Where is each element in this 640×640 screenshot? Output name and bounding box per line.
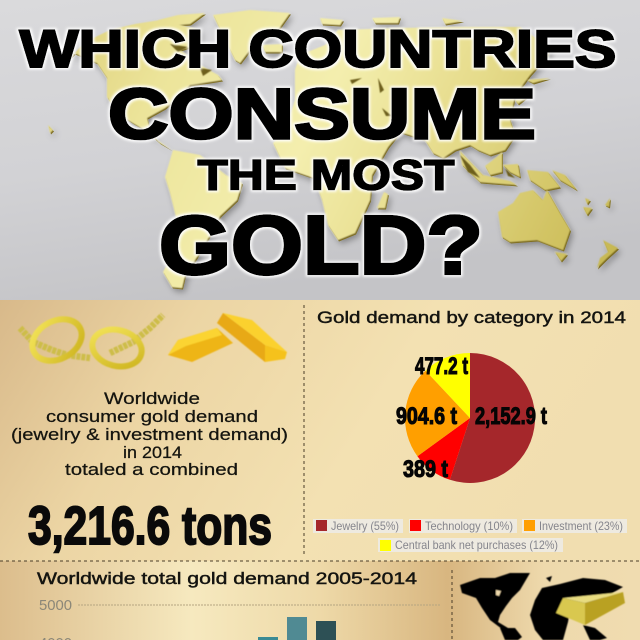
pie value labels: 2,152.9 t: [475, 403, 547, 430]
section background: consumer demand and category: [0, 300, 640, 561]
legend: Investment (23%): [539, 519, 623, 533]
title: GOLD?: [159, 198, 483, 292]
legend: Central bank net purchases (12%): [395, 538, 558, 552]
bar chart: [39, 597, 440, 640]
title: CONSUME: [108, 74, 536, 154]
section background: total demand and map: [0, 561, 640, 640]
icon: gold bars: [168, 313, 287, 362]
text: worldwide consumer gold demand: Worldwide: [104, 389, 200, 408]
pie value labels: [396, 353, 547, 483]
legend: [313, 519, 627, 552]
world map in gold: [48, 10, 618, 288]
pie value labels: 904.6 t: [396, 403, 457, 430]
big number: 3,216.6 tons: 3,216.6 tons: [28, 496, 272, 556]
text: worldwide consumer gold demand: consumer gold demand: [46, 407, 258, 426]
divider: [303, 305, 305, 556]
legend: Jewelry (55%): [331, 519, 399, 533]
text: worldwide consumer gold demand: totaled a combined: [65, 460, 238, 479]
pie value labels: 389 t: [403, 456, 448, 483]
text: worldwide consumer gold demand: in 2014: [123, 443, 182, 462]
divider: [451, 570, 453, 640]
title: THE MOST: [198, 152, 455, 199]
heading: worldwide total gold demand: Worldwide total gold demand 2005-2014: [37, 569, 417, 588]
header background: [0, 0, 640, 300]
divider: [0, 560, 640, 562]
icon: black world map with gold bar: [460, 573, 625, 640]
heading: gold demand by category: Gold demand by category in 2014: [317, 308, 626, 327]
icon: gold rings and chain: [20, 311, 163, 372]
pie value labels: 477.2 t: [415, 353, 468, 380]
pie chart: [396, 353, 547, 483]
text: worldwide consumer gold demand: (jewelry & investment demand): [11, 425, 288, 444]
title: WHICH COUNTRIES: [20, 20, 616, 79]
text: worldwide consumer gold demand: [11, 389, 288, 479]
bar chart: 5000: [39, 597, 72, 614]
legend: Technology (10%): [425, 519, 513, 533]
map shading details: [170, 44, 515, 178]
title: [20, 20, 616, 292]
